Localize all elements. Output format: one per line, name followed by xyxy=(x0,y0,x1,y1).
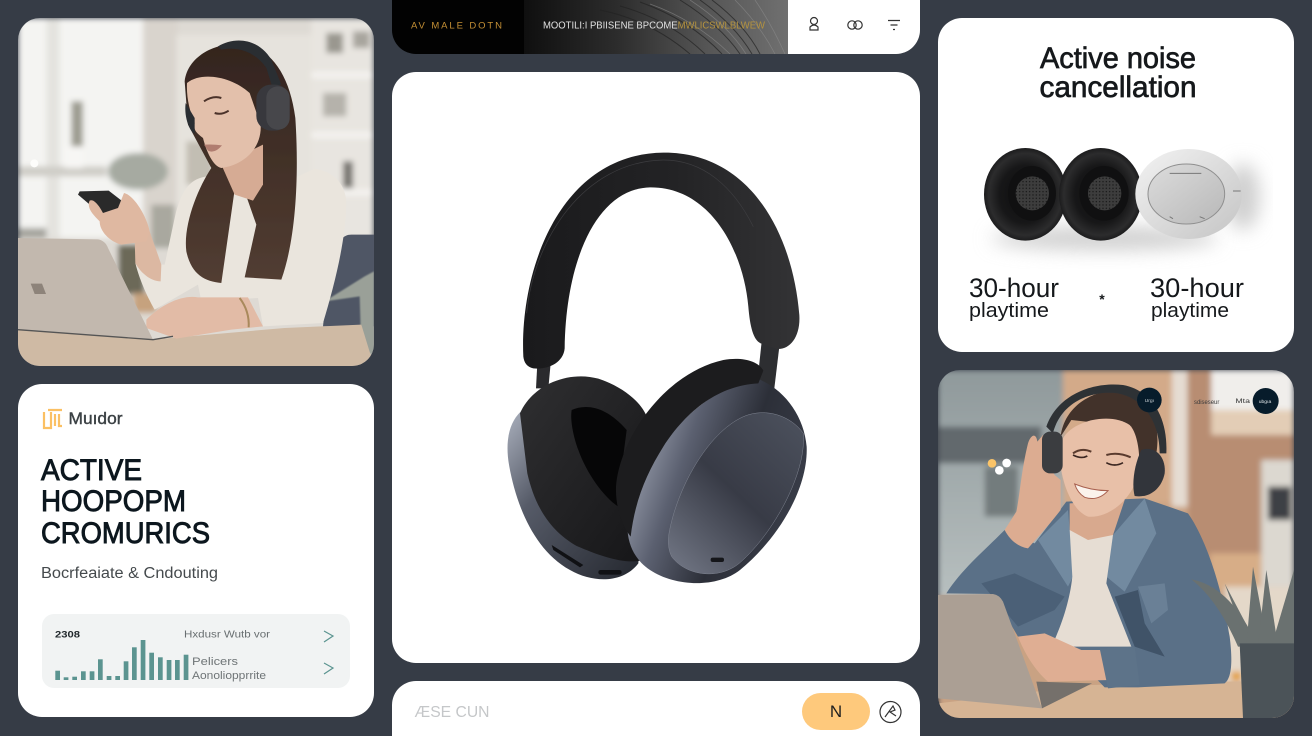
stat: playtime right: 30-hour xyxy=(1150,273,1244,303)
button xyxy=(802,693,870,730)
overlay badge left xyxy=(1137,388,1162,412)
pot and plant xyxy=(325,271,374,355)
panel: noise cancellation xyxy=(938,18,1294,352)
right cup xyxy=(627,378,807,583)
nav label: AV MALE DOTN xyxy=(411,20,502,32)
heading: HOOPOPM xyxy=(41,485,186,518)
headband xyxy=(523,153,799,369)
icon: rings xyxy=(848,21,862,29)
headphones on woman xyxy=(1042,384,1166,496)
subheading: Bocrfeaiate & Cndouting xyxy=(41,565,218,582)
pad xyxy=(984,148,1067,241)
pad xyxy=(1059,148,1142,241)
hair texture strip xyxy=(524,0,788,54)
heading: ACTIVE xyxy=(41,454,142,487)
silver cup xyxy=(1135,149,1242,239)
laptop xyxy=(938,594,1042,708)
raised arm xyxy=(135,231,161,281)
overlay badge right: ubgıa xyxy=(1259,399,1271,405)
bar placeholder text: ÆSE CUN xyxy=(414,704,490,721)
jacket cuff xyxy=(1100,646,1131,688)
pot xyxy=(1240,643,1294,718)
ear pads and silver cup xyxy=(984,148,1260,250)
panel: hero product xyxy=(392,72,920,663)
bar chart xyxy=(55,640,188,680)
stat: playtime right: playtime xyxy=(1151,299,1229,322)
hair xyxy=(1061,390,1157,457)
heading: Active noise xyxy=(1040,42,1196,75)
left stem xyxy=(536,363,551,388)
nav tagline: MOOTILI:I PBIISENE BPCOMEMWLICSWLBLWEW xyxy=(543,20,765,32)
chair xyxy=(323,235,374,326)
icon: brand logo xyxy=(44,410,62,428)
stat: playtime right xyxy=(1150,273,1244,322)
bottom action bar xyxy=(392,681,920,736)
lower hand xyxy=(146,297,263,339)
button: N xyxy=(830,702,842,721)
heading xyxy=(1040,42,1196,104)
overlay badge left: Urgı xyxy=(1145,398,1154,404)
phone xyxy=(78,191,140,231)
right stem xyxy=(757,342,779,397)
table xyxy=(18,325,374,366)
stat: playtime left: 30-hour xyxy=(969,273,1059,303)
jacket xyxy=(946,498,1231,687)
brand name: Muıdor xyxy=(68,409,123,428)
overlay dots xyxy=(988,459,1011,475)
stat description: Pelicers xyxy=(192,656,239,668)
icon: user xyxy=(810,18,818,30)
sweater xyxy=(135,169,346,326)
table xyxy=(938,680,1294,718)
overlay label: sdiseseur xyxy=(1194,400,1219,406)
plant xyxy=(1191,567,1294,647)
headphones on woman xyxy=(185,40,290,134)
raised arm and hand xyxy=(1005,435,1061,548)
photo panel: smiling woman with denim jacket xyxy=(938,370,1294,718)
overlay badge right xyxy=(1253,388,1279,414)
stat: playtime left: playtime xyxy=(969,299,1049,322)
lower hand xyxy=(1018,633,1110,682)
stat label: Hxdusr Wutb vor xyxy=(184,628,271,640)
stat description: Aonoliopprrite xyxy=(192,670,266,682)
neck xyxy=(221,145,263,201)
stat year: 2308 xyxy=(55,630,80,640)
laptop xyxy=(18,238,153,340)
heading: CROMURICS xyxy=(41,517,210,550)
t-shirt xyxy=(1051,530,1131,647)
stat description xyxy=(192,656,266,682)
woman figure xyxy=(946,384,1231,688)
neck xyxy=(1070,500,1125,540)
panel: product card xyxy=(18,384,374,717)
stat: playtime left xyxy=(969,273,1059,322)
heading: cancellation xyxy=(1040,71,1196,104)
icon: filter xyxy=(888,20,900,30)
stats box xyxy=(42,614,350,688)
hair back xyxy=(185,44,297,283)
heading xyxy=(41,454,210,550)
woman figure xyxy=(78,40,346,339)
separator star: * xyxy=(1099,291,1105,307)
photo panel: woman with phone and laptop xyxy=(18,18,374,366)
right cup plate xyxy=(668,413,804,574)
face xyxy=(187,77,261,168)
icon: arrows xyxy=(324,631,333,674)
product image: headphones xyxy=(508,153,807,583)
hand holding phone xyxy=(89,193,150,245)
face xyxy=(1061,419,1139,517)
left cup xyxy=(508,412,647,579)
icon: circular glyph xyxy=(880,702,901,722)
overlay label: Mta xyxy=(1235,399,1251,405)
top navigation bar xyxy=(392,0,920,54)
